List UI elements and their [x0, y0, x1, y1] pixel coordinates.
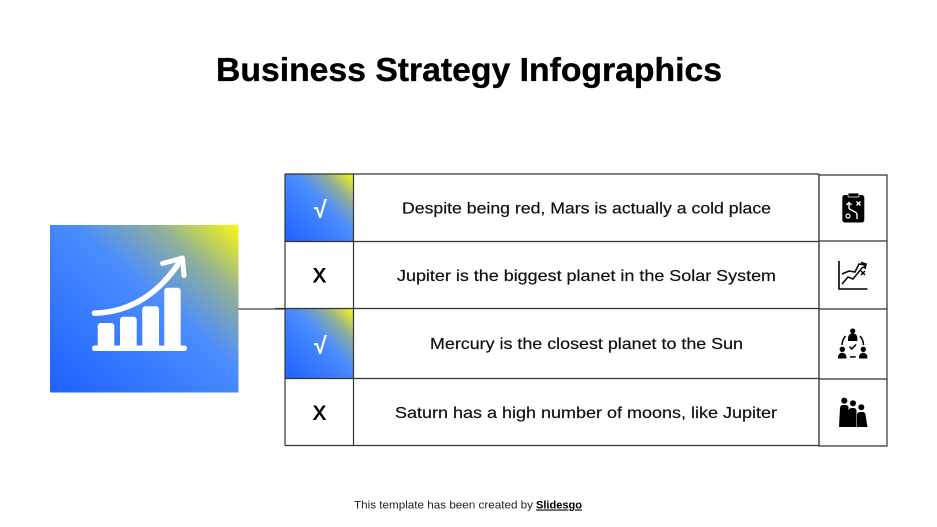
icon: group of people	[839, 398, 868, 427]
panel: icon column	[819, 175, 887, 446]
title: Business Strategy Infographics	[216, 52, 722, 89]
row 2 text: Jupiter is the biggest planet in the Solar System	[397, 268, 776, 285]
row 2 cross mark: X	[313, 266, 326, 287]
icon: team cycle	[838, 328, 867, 358]
row 1 check cell: √	[314, 196, 327, 222]
panel: comparison table	[275, 174, 819, 446]
row 3 check cell	[285, 308, 354, 378]
icon: growth bar chart	[92, 258, 187, 351]
icon: strategy clipboard	[842, 193, 864, 222]
row 4 cross mark: X	[313, 404, 326, 424]
row 3 text: Mercury is the closest planet to the Sun	[430, 336, 743, 353]
row 1 text: Despite being red, Mars is actually a cold place	[402, 200, 771, 218]
footer credit: This template has been created by	[354, 500, 534, 512]
connector line	[238, 308, 285, 310]
panel: main chart icon square	[50, 225, 238, 392]
row 4 text: Saturn has a high number of moons, like Jupiter	[395, 405, 777, 422]
row 1 check cell	[285, 174, 354, 242]
footer credit: Slidesgo	[536, 500, 582, 512]
icon: line chart	[839, 261, 868, 289]
row 3 check cell: √	[314, 332, 327, 358]
